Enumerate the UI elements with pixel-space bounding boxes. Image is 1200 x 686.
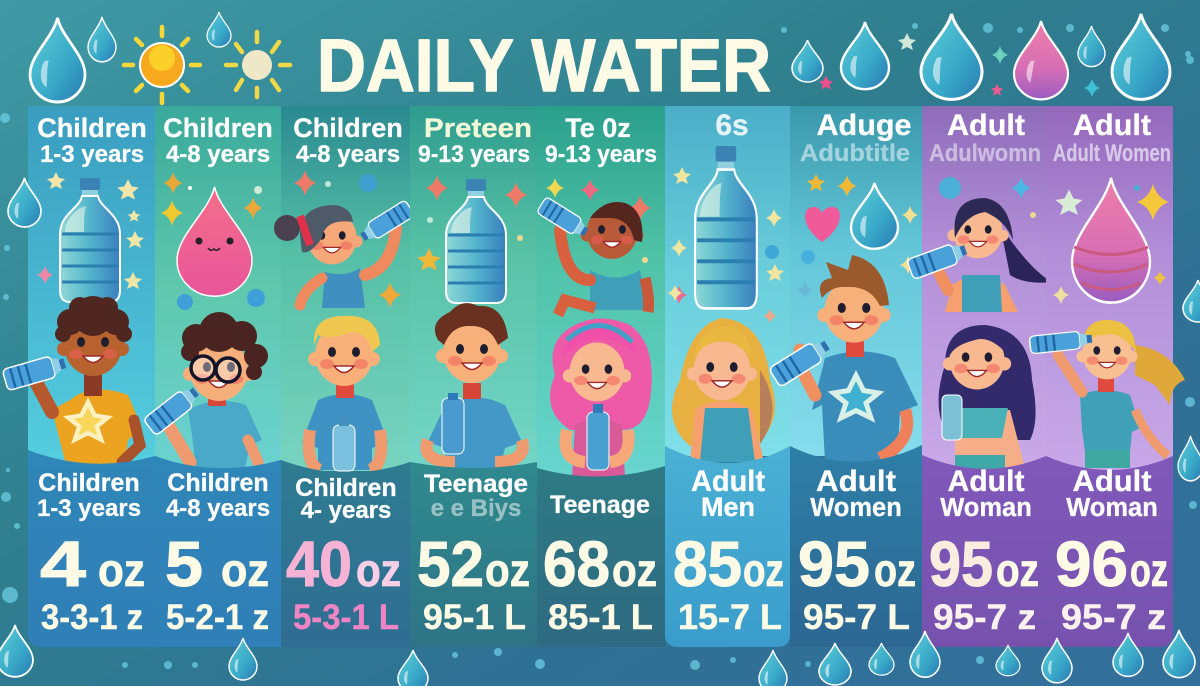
heading: preteen 9-13 years (418, 113, 532, 168)
value: 5 oz (165, 528, 269, 600)
faded subheading: Adulwomn (929, 140, 1041, 167)
value: 52 oz: oz (485, 544, 530, 596)
label: teenage: Teenage (550, 491, 650, 519)
lower band (1046, 456, 1173, 647)
value: 85 oz: oz (743, 544, 784, 596)
value: 4 oz: oz (98, 544, 145, 596)
heading: children 4-8 years (163, 113, 273, 168)
value: 95 oz (929, 528, 1039, 600)
child with bottle (2, 296, 142, 465)
heading: Aduge (816, 109, 912, 142)
value: 68 oz: 68 (543, 528, 610, 600)
lower band (410, 462, 537, 647)
heading: Adult (947, 109, 1025, 142)
value: 4 oz: 4 (40, 528, 87, 600)
heading: children 4-8 years: 4-8 years (166, 141, 270, 168)
sparkles (546, 178, 651, 263)
value: 95 oz (798, 528, 916, 600)
value: 68 oz (543, 528, 657, 600)
value: 95 oz: 95 (798, 528, 870, 600)
value range: 85-1 L (548, 598, 653, 637)
value: 5 oz: 5 (165, 528, 203, 600)
lower band (537, 466, 665, 647)
column background (155, 106, 281, 471)
child with small bottle (302, 316, 388, 471)
panel: children 1-3 years (2, 106, 155, 647)
value: 40 oz: oz (356, 544, 401, 596)
value: 95 oz: oz (996, 544, 1039, 596)
sparkles (668, 167, 784, 323)
column background (1046, 106, 1173, 471)
panel: children 4-8 years (143, 106, 281, 647)
label: adult women: Women (810, 494, 902, 522)
label: adult women: Adult (816, 465, 896, 498)
label: adult women (810, 465, 902, 522)
heading: 6s (715, 109, 749, 142)
lower band (665, 446, 790, 647)
value: 95 oz: 95 (929, 528, 993, 600)
faded label: e e Biys (431, 495, 521, 522)
heading: Adult (1073, 109, 1151, 142)
decorative drops top-right (792, 14, 1170, 99)
label: children 4- years: 4- years (301, 497, 391, 524)
heading: te 0z 9-13 years: 9-13 years (545, 141, 657, 168)
decorative drops bottom and edges (0, 178, 1200, 686)
icon: pink drop with face (177, 187, 252, 296)
icon: sun (124, 27, 200, 103)
label: adult men (691, 465, 765, 522)
lower band (281, 460, 410, 647)
label: adult men: Adult (691, 465, 765, 498)
girl with long dark hair (939, 325, 1036, 469)
label: adult woman: Woman (940, 494, 1032, 522)
label: children 1-3 years: Children (38, 469, 140, 497)
label: children 4-8 years (166, 469, 270, 522)
decorative drops top-left (30, 12, 231, 102)
heading: children 4-8 years: 4-8 years (296, 141, 400, 168)
lower band (28, 450, 155, 647)
heading: children 1-3 years (37, 113, 147, 168)
label: adult woman (940, 465, 1032, 522)
column background (665, 106, 790, 456)
value range: 3-3-1 z (41, 598, 143, 637)
value range: 95-7 z (1061, 598, 1166, 637)
column background (537, 106, 665, 481)
value range: 15-7 L (678, 598, 782, 637)
heading: te 0z 9-13 years: Te 0z (565, 113, 631, 143)
icon: water bottle (446, 179, 506, 303)
sparkles (417, 175, 527, 270)
column background (410, 106, 537, 471)
column background (922, 106, 1046, 471)
value range: 5-2-1 z (166, 598, 269, 637)
label: adult woman: Adult (1072, 465, 1152, 498)
icon: water bottle (60, 178, 120, 302)
value range: 95-7 L (803, 598, 910, 637)
label: children 4- years: Children (295, 474, 397, 502)
heading: children 1-3 years: Children (37, 113, 147, 143)
label: adult woman: Adult (948, 465, 1025, 498)
panel: adult women, ponytail (1029, 106, 1185, 647)
heading: children 4-8 years: Children (293, 113, 403, 143)
heading: children 4-8 years: Children (163, 113, 273, 143)
value: 95 oz: oz (874, 544, 916, 596)
label: adult woman: Woman (1066, 494, 1158, 522)
faded subheading: Adubtitle (800, 140, 910, 167)
panel: adult women, boy (769, 106, 922, 647)
icon: pale sun (226, 32, 290, 97)
boy with bottle and star shirt (769, 255, 918, 462)
heading: children 1-3 years: 1-3 years (40, 141, 144, 168)
icon: water drop (851, 183, 898, 249)
heading: preteen 9-13 years: 9-13 years (418, 141, 530, 168)
child drinking (274, 200, 415, 308)
value range: 5-3-1 L (293, 598, 399, 637)
label: adult woman (1066, 465, 1158, 522)
label: children 4-8 years: 4-8 years (166, 495, 270, 522)
panel: children 4-8 years, drinking (274, 106, 415, 647)
lower band (155, 456, 281, 647)
value: 40 oz (286, 528, 401, 600)
value: 85 oz (673, 528, 784, 600)
heading: te 0z 9-13 years (545, 113, 657, 168)
label: children 1-3 years (37, 469, 141, 522)
child with glasses (143, 312, 268, 468)
panel: adult woman (907, 106, 1052, 647)
value range: 95-1 L (423, 598, 526, 637)
girl drinking (907, 198, 1052, 312)
title: DAILY WATER (317, 24, 771, 107)
sparkles (37, 172, 144, 289)
panel: teens 9-13 years (536, 106, 665, 647)
value: 52 oz: 52 (417, 528, 484, 600)
sparkles (939, 177, 1036, 218)
value: 68 oz: oz (612, 544, 657, 596)
icon: heart (805, 207, 840, 242)
girl with blonde hair (672, 318, 775, 462)
heading: children 4-8 years (293, 113, 403, 168)
icon: tall water bottle (695, 146, 757, 308)
value: 85 oz: 85 (673, 528, 742, 600)
value: 96 oz: 96 (1055, 528, 1128, 600)
sparkles (1053, 184, 1169, 304)
sparkles (161, 172, 265, 310)
girl with ponytail (1029, 320, 1185, 468)
panel: adult men, bottle (665, 106, 790, 647)
label: teenage boys: Teenage (424, 470, 528, 498)
lower band (922, 455, 1046, 647)
heading: preteen 9-13 years: Preteen (424, 113, 532, 143)
panel: preteen 9-13 years (410, 106, 537, 647)
boy with bottle (427, 303, 523, 468)
value: 52 oz (417, 528, 530, 600)
column background (790, 106, 922, 456)
sparkles (294, 170, 401, 308)
value: 96 oz (1055, 528, 1168, 600)
value: 40 oz: 40 (286, 528, 352, 600)
label: children 1-3 years: 1-3 years (37, 495, 141, 522)
girl with pink hair (550, 318, 652, 478)
value: 4 oz (40, 528, 145, 600)
icon: layered pink drop (1072, 178, 1150, 303)
label: children 4-8 years: Children (167, 469, 269, 497)
column background (281, 106, 410, 471)
value range: 95-7 z (933, 598, 1036, 637)
sparkles (797, 174, 918, 299)
value: 96 oz: oz (1130, 544, 1168, 596)
label: children 4- years (295, 474, 397, 524)
lower band (790, 445, 922, 647)
label: adult men: Men (701, 492, 755, 522)
value: 5 oz: oz (221, 544, 269, 596)
column background (28, 106, 155, 471)
child drinking (536, 197, 649, 315)
